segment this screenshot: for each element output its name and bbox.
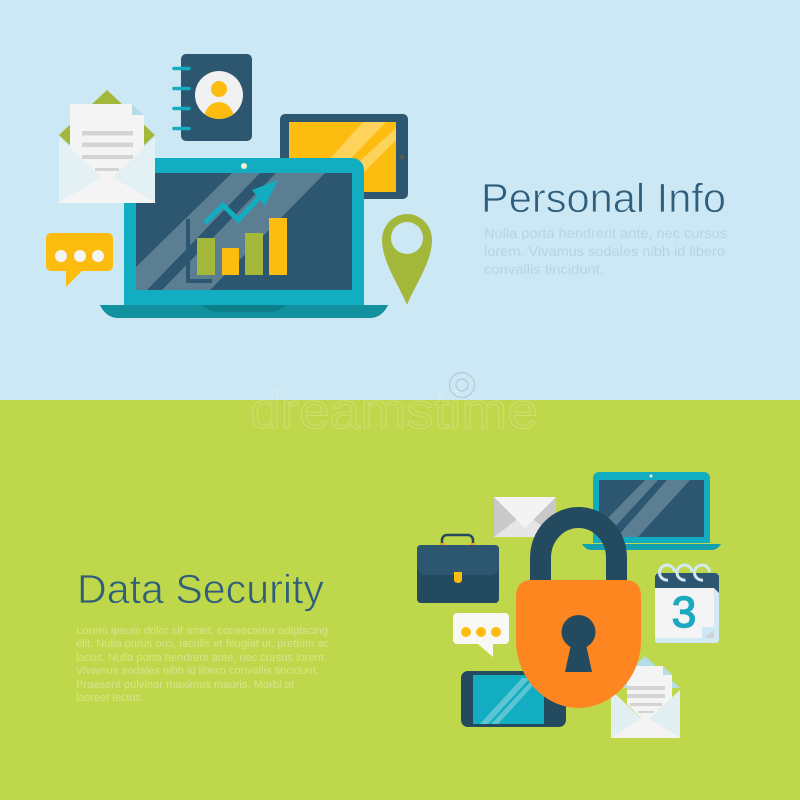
icon: laptop with growth chart bbox=[100, 158, 388, 318]
heading: Data Security: Data Security bbox=[77, 566, 324, 612]
text block: data security body: Lorem ipsum dolor sit amet, consectetur adipiscing bbox=[76, 625, 328, 637]
icon: calendar bbox=[655, 565, 719, 643]
text block: data security body: Praesent pulvinar maximus mauris. Morbi at bbox=[76, 679, 295, 691]
icon: closed envelope bbox=[494, 497, 556, 537]
illustration: data security devices bbox=[417, 472, 721, 738]
text block: data security body: laoreet lectus. bbox=[76, 692, 144, 704]
text block: personal info body: convallis tincidunt. bbox=[484, 262, 604, 277]
icon: open envelope bbox=[58, 90, 156, 203]
icon: tablet bbox=[280, 114, 408, 199]
text block: data security body bbox=[76, 625, 329, 704]
panel: data security background bbox=[0, 400, 800, 800]
icon: open envelope bbox=[611, 656, 680, 738]
icon: calendar: 3 bbox=[672, 588, 696, 637]
text block: data security body: elit. Nulla purus orci, iaculis et feugiat ut, pretium ac bbox=[76, 638, 329, 650]
icon: smartphone bbox=[461, 671, 566, 727]
text block: data security body: Vivamus sodales nibh id libero convallis tincidunt. bbox=[76, 665, 319, 677]
icon: padlock bbox=[516, 518, 641, 708]
icon: map pin bbox=[382, 214, 432, 305]
icon: briefcase bbox=[417, 535, 499, 603]
panel: personal info background bbox=[0, 0, 800, 400]
icon: address book bbox=[174, 54, 252, 141]
text block: data security body: lacus. Nulla porta hendrerit ante, nec cursus lorem. bbox=[76, 652, 327, 664]
illustration: personal info devices bbox=[46, 54, 432, 318]
text block: personal info body: lorem. Vivamus sodales nibh id libero bbox=[484, 244, 725, 259]
heading: Personal Info: Personal Info bbox=[481, 175, 726, 221]
arrow: rising trend bbox=[205, 180, 278, 223]
watermark: dreamstime: dreamstime bbox=[250, 383, 538, 439]
icon: laptop bbox=[582, 472, 721, 550]
icon: chat bubble bbox=[46, 233, 113, 287]
text block: personal info body bbox=[484, 226, 727, 277]
bar chart bbox=[197, 218, 287, 275]
icon: chat bubble bbox=[453, 613, 509, 657]
text block: personal info body: Nulla porta hendrerit ante, nec cursus bbox=[484, 226, 727, 241]
